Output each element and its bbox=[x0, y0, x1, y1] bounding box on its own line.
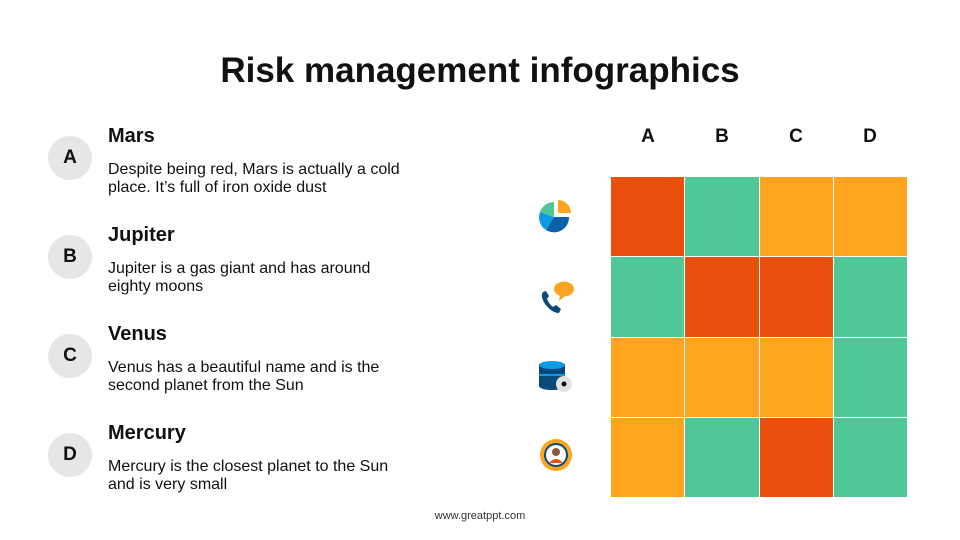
column headers bbox=[641, 126, 877, 147]
text Venus: Venus has a beautiful name and is the bbox=[108, 359, 379, 376]
heading Mars: Mars bbox=[108, 125, 155, 147]
column headers: D bbox=[863, 126, 877, 147]
badge A: A bbox=[63, 147, 77, 168]
text Mercury: and is very small bbox=[108, 476, 227, 493]
column headers: B bbox=[715, 126, 729, 147]
column headers: C bbox=[789, 126, 803, 147]
badge D bbox=[48, 433, 92, 477]
icon: phone chat bbox=[542, 282, 574, 313]
column headers: A bbox=[641, 126, 655, 147]
text Venus bbox=[108, 359, 379, 394]
item A bbox=[48, 125, 400, 196]
text Jupiter bbox=[108, 260, 370, 295]
badge A bbox=[48, 136, 92, 180]
badge B bbox=[48, 235, 92, 279]
text Jupiter: Jupiter is a gas giant and has around bbox=[108, 260, 370, 277]
text Mercury: Mercury is the closest planet to the Sun bbox=[108, 458, 388, 475]
item B bbox=[48, 224, 370, 295]
item C bbox=[48, 323, 379, 394]
text Venus: second planet from the Sun bbox=[108, 377, 304, 394]
heading Mercury: Mercury bbox=[108, 422, 186, 444]
icon: database gear bbox=[539, 361, 572, 392]
icon: pie chart bbox=[539, 200, 571, 232]
text Mars bbox=[108, 161, 400, 196]
text Mercury bbox=[108, 458, 388, 493]
footer url: www.greatppt.com bbox=[435, 510, 525, 522]
badge B: B bbox=[63, 246, 77, 267]
heading Venus: Venus bbox=[108, 323, 167, 345]
text Jupiter: eighty moons bbox=[108, 278, 203, 295]
badge D: D bbox=[63, 444, 77, 465]
text Mars: place. It’s full of iron oxide dust bbox=[108, 179, 326, 196]
risk matrix grid bbox=[611, 177, 907, 497]
heading Jupiter: Jupiter bbox=[108, 224, 175, 246]
title: Risk management infographics bbox=[220, 51, 740, 90]
text Mars: Despite being red, Mars is actually a cold bbox=[108, 161, 400, 178]
badge C bbox=[48, 334, 92, 378]
item D bbox=[48, 422, 388, 493]
badge C: C bbox=[63, 345, 77, 366]
icon: person gear bbox=[540, 439, 572, 471]
